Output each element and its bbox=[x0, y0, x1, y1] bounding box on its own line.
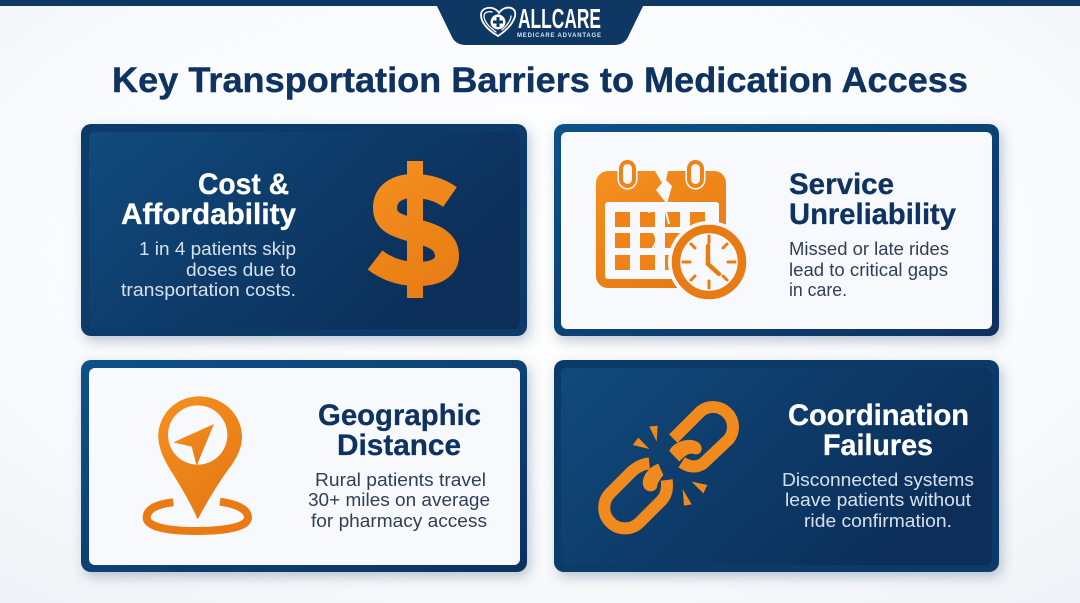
text: service bbox=[789, 239, 949, 300]
logo wordmark: ALLCARE bbox=[518, 3, 601, 34]
icon: dollar sign bbox=[375, 161, 450, 298]
heading: service bbox=[789, 168, 957, 231]
heading: geographic bbox=[318, 399, 481, 462]
icon: heart with cross bbox=[481, 8, 515, 36]
text: cost: doses due to bbox=[186, 260, 296, 280]
panel: cost and affordability bbox=[81, 124, 527, 336]
logo badge bbox=[434, 0, 646, 45]
clock bbox=[668, 221, 750, 303]
text: geographic: Rural patients travel bbox=[315, 470, 486, 490]
text: geographic bbox=[308, 470, 490, 531]
text: cost bbox=[121, 239, 296, 300]
heading: coordination bbox=[788, 399, 969, 462]
text: coordination: ride confirmation. bbox=[804, 511, 952, 531]
heading: cost: Cost & bbox=[198, 168, 289, 201]
text: service: in care. bbox=[789, 280, 847, 300]
heading: cost bbox=[121, 168, 297, 231]
text: coordination: Disconnected systems bbox=[782, 470, 974, 490]
text: geographic: 30+ miles on average bbox=[308, 490, 490, 510]
heading: service: Unreliability bbox=[789, 198, 957, 231]
heading: geographic: Distance bbox=[337, 429, 461, 462]
heading: coordination: Failures bbox=[823, 429, 933, 462]
icon: map pin bbox=[147, 396, 248, 531]
top bar bbox=[0, 0, 1080, 6]
icon: broken calendar with clock bbox=[596, 160, 750, 303]
text: cost: transportation costs. bbox=[121, 280, 296, 300]
heading: geographic: Geographic bbox=[318, 399, 481, 432]
heading: coordination: Coordination bbox=[788, 399, 969, 432]
heading: service: Service bbox=[789, 168, 894, 201]
panel: service unreliability bbox=[554, 124, 999, 336]
text: service: Missed or late rides bbox=[789, 239, 949, 259]
text: coordination bbox=[782, 470, 974, 531]
heading: cost: Affordability bbox=[121, 198, 297, 231]
text: service: lead to critical gaps bbox=[789, 260, 948, 280]
text: cost: 1 in 4 patients skip bbox=[139, 239, 296, 259]
panel: geographic distance bbox=[81, 360, 527, 572]
icon: broken chain link bbox=[604, 407, 733, 528]
logo tagline: MEDICARE ADVANTAGE bbox=[517, 33, 601, 39]
text: coordination: leave patients without bbox=[785, 490, 971, 510]
panel: coordination failures bbox=[554, 360, 999, 572]
title: Key Transportation Barriers to Medication Access bbox=[112, 61, 968, 100]
text: geographic: for pharmacy access bbox=[311, 511, 487, 531]
